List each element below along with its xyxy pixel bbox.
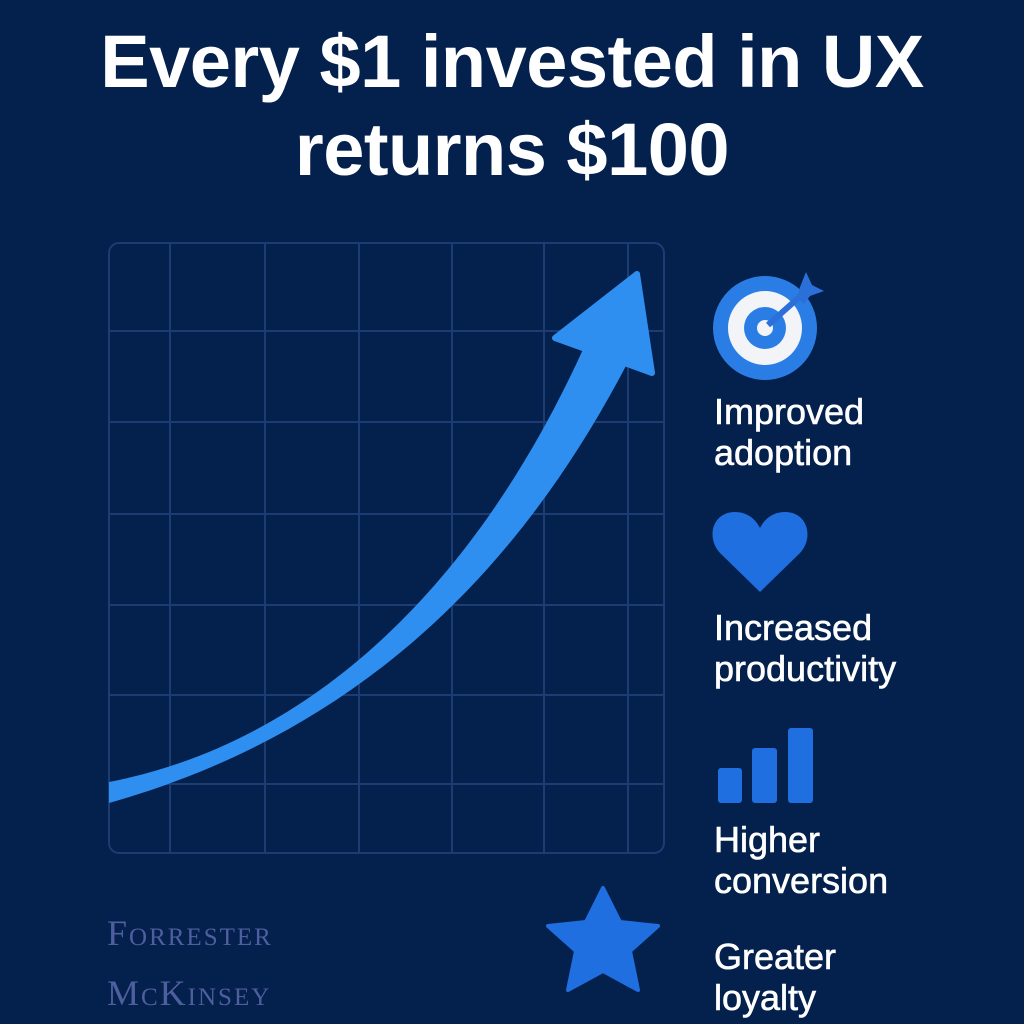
label: higher conversion: Higher	[714, 819, 820, 860]
label: improved adoption	[714, 391, 864, 473]
label: increased productivity: productivity	[714, 648, 896, 689]
label: increased productivity	[714, 607, 896, 689]
title	[100, 20, 924, 191]
title: returns $100	[295, 108, 729, 191]
label: greater loyalty: loyalty	[714, 977, 816, 1018]
label: greater loyalty: Greater	[714, 936, 836, 977]
logo: Forrester: Forrester	[107, 913, 273, 953]
icon: heart	[713, 512, 807, 592]
label: improved adoption: Improved	[714, 391, 864, 432]
label: higher conversion: conversion	[714, 860, 888, 901]
icon: bar chart	[718, 728, 813, 803]
label: improved adoption: adoption	[714, 432, 852, 473]
logo: McKinsey: McKinsey	[107, 973, 271, 1013]
label: greater loyalty	[714, 936, 836, 1018]
label: higher conversion	[714, 819, 888, 901]
icon: target	[713, 272, 824, 380]
label: increased productivity: Increased	[714, 607, 872, 648]
arrow	[109, 274, 652, 803]
icon: star	[548, 888, 658, 990]
title: Every $1 invested in UX	[100, 20, 924, 103]
